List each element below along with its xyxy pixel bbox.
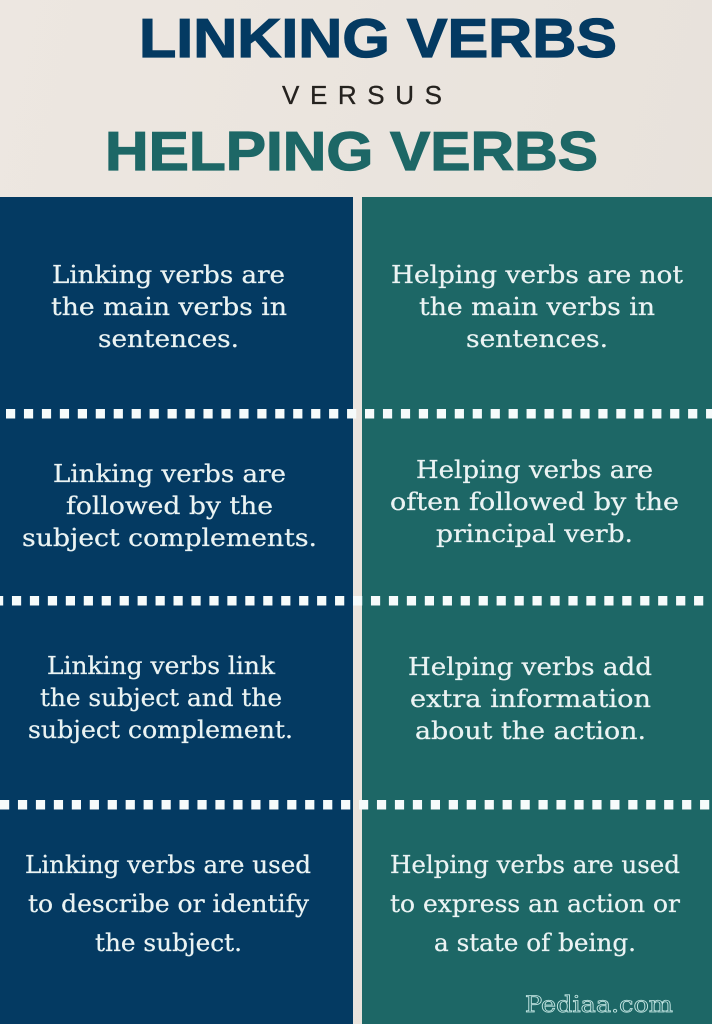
dotted divider 3 bbox=[0, 800, 712, 809]
text: helping row 2 bbox=[390, 456, 679, 548]
text: helping row 2: Helping verbs are bbox=[416, 456, 653, 484]
text: helping row 1: Helping verbs are not bbox=[391, 261, 683, 289]
text: linking row 3: the subject and the bbox=[40, 684, 282, 712]
text: linking row 4: Linking verbs are used bbox=[25, 851, 311, 879]
text: helping row 3: Helping verbs add bbox=[408, 653, 652, 681]
panel: linking verbs column bbox=[0, 197, 353, 1024]
text: helping row 1: the main verbs in bbox=[419, 293, 655, 321]
text: linking row 3: Linking verbs link bbox=[47, 652, 275, 680]
label: versus: VERSUS bbox=[282, 80, 442, 110]
text: linking row 1 bbox=[51, 261, 287, 353]
text: helping row 4: a state of being. bbox=[434, 929, 636, 957]
text: linking row 4: to describe or identify bbox=[28, 890, 309, 918]
text: helping row 2: principal verb. bbox=[436, 520, 633, 548]
text: linking row 2: subject complements. bbox=[22, 524, 317, 552]
text: linking row 1: sentences. bbox=[98, 325, 239, 353]
dotted divider 1 bbox=[6, 409, 712, 418]
text: linking row 4: the subject. bbox=[95, 929, 242, 957]
text: helping row 4: Helping verbs are used bbox=[390, 851, 680, 879]
title block bbox=[105, 7, 617, 182]
text: linking row 2: Linking verbs are bbox=[53, 460, 286, 488]
panel: helping verbs column bbox=[362, 197, 712, 1024]
heading: linking verbs: LINKING VERBS bbox=[139, 7, 617, 69]
text: linking row 2: followed by the bbox=[66, 492, 273, 520]
text: helping row 4: to express an action or bbox=[390, 890, 681, 918]
dotted divider 2 bbox=[0, 596, 704, 605]
text: linking row 1: Linking verbs are bbox=[52, 261, 285, 289]
text: helping row 2: often followed by the bbox=[390, 488, 679, 516]
text: linking row 3: subject complement. bbox=[28, 716, 293, 744]
text: linking row 1: the main verbs in bbox=[51, 293, 287, 321]
text: helping row 4 bbox=[390, 851, 681, 957]
logo: pediaa.com: Pediaa.com bbox=[525, 993, 673, 1018]
heading: helping verbs: HELPING VERBS bbox=[105, 120, 598, 182]
text: helping row 3: extra information bbox=[410, 685, 651, 713]
text: helping row 1: sentences. bbox=[466, 325, 608, 353]
text: linking row 3 bbox=[28, 652, 293, 744]
text: helping row 1 bbox=[391, 261, 683, 353]
text: helping row 3 bbox=[408, 653, 652, 745]
text: helping row 3: about the action. bbox=[415, 717, 646, 745]
text: linking row 2 bbox=[22, 460, 317, 552]
text: linking row 4 bbox=[25, 851, 311, 957]
